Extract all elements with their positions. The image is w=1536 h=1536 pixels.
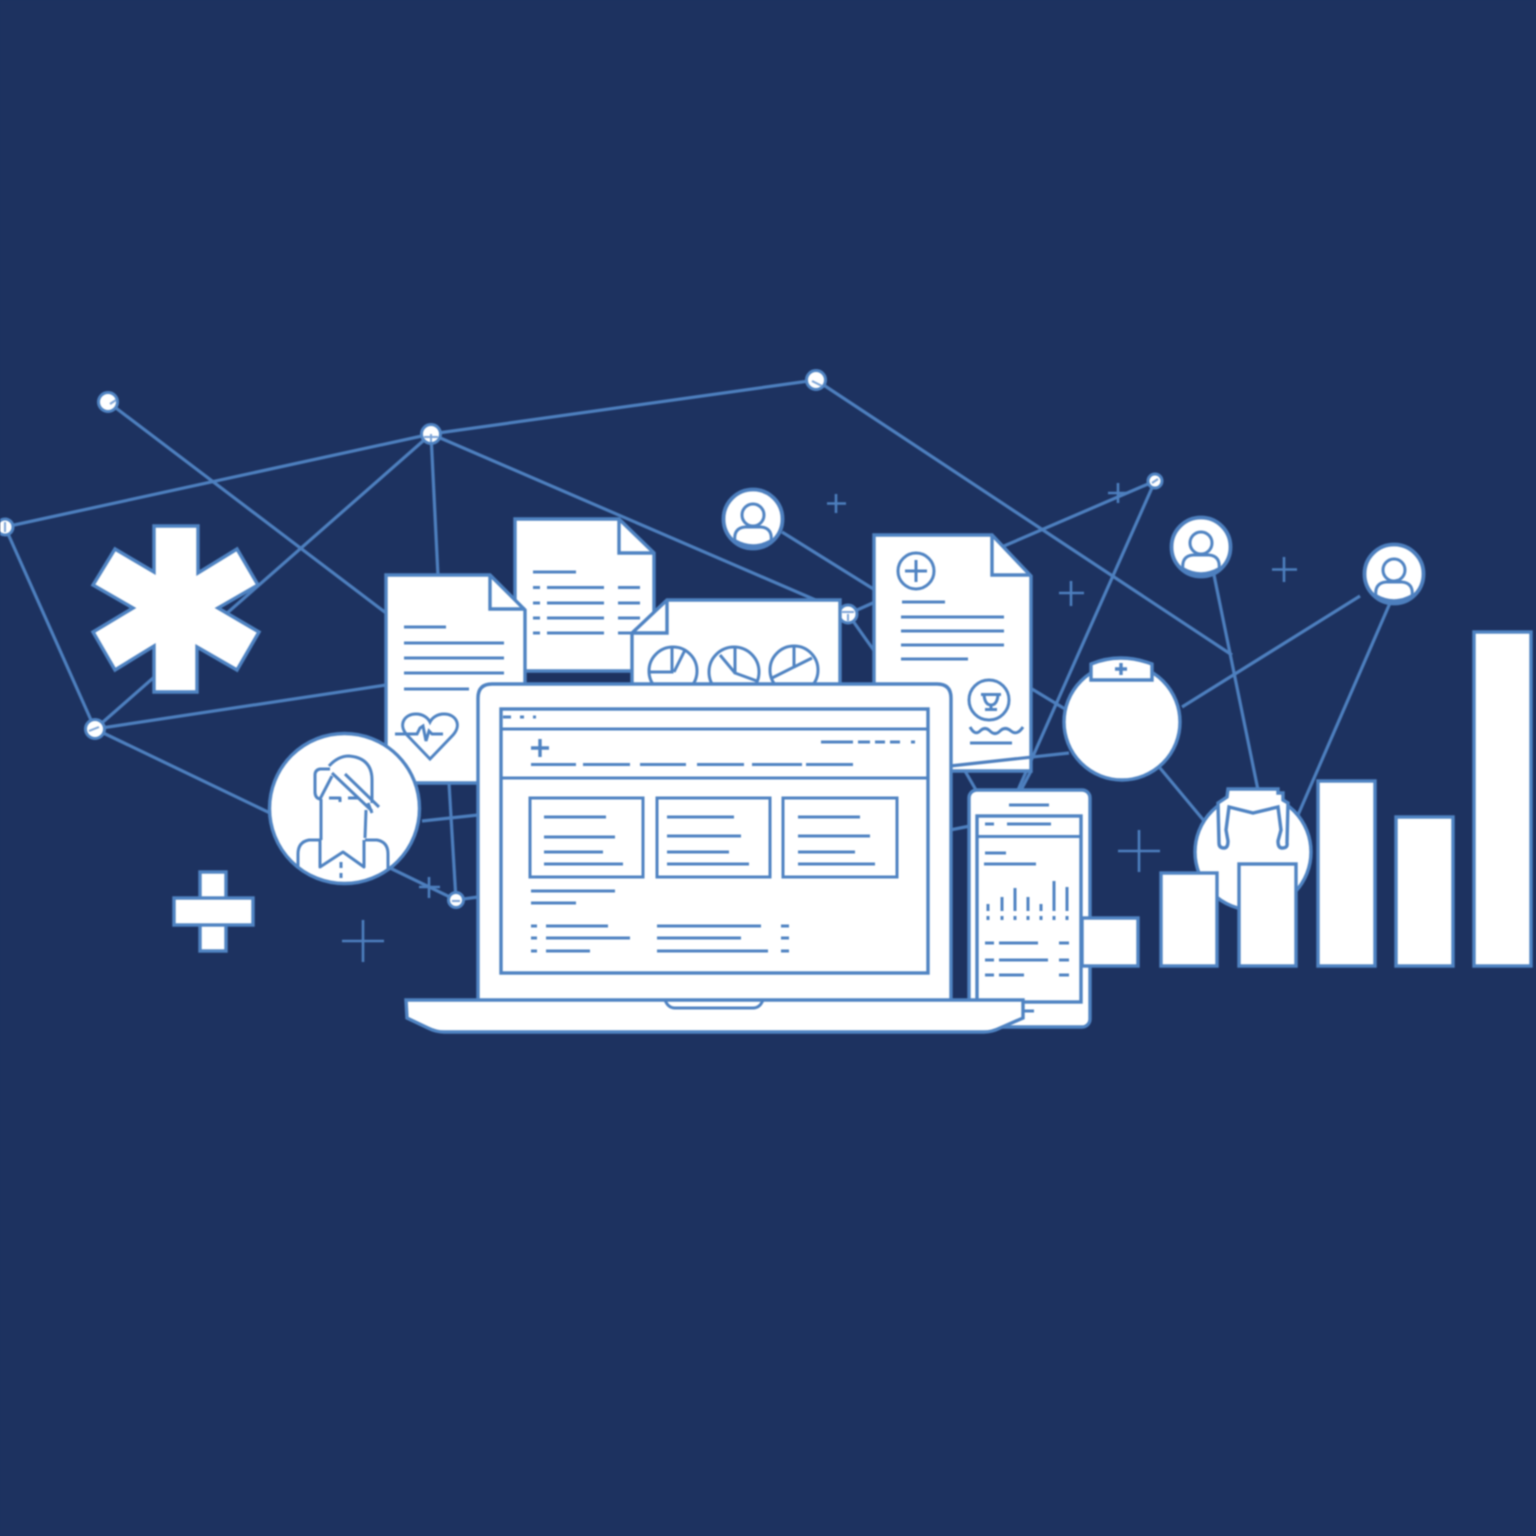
icon: plus badge: [898, 553, 934, 589]
icon: heart with pulse: [395, 714, 457, 759]
network connection lines: [5, 380, 1390, 900]
user icon 3: [1364, 544, 1424, 604]
document: pie chart sheet: [632, 600, 840, 697]
dashboard card 1: [530, 798, 643, 877]
icon: trophy seal: [969, 680, 1009, 720]
line crossing certificate to nurse: [950, 753, 1069, 766]
bar chart: [1161, 632, 1531, 966]
user icon 1: [724, 490, 782, 548]
document: lined report behind: [515, 519, 654, 671]
small plus signs: [342, 483, 1297, 962]
icon: star of life asterisk: [93, 526, 259, 692]
laptop base: [406, 1000, 1023, 1032]
network nodes: [0, 370, 1162, 908]
phone: [969, 790, 1138, 1027]
bar chart first bar: [1082, 918, 1138, 966]
pie charts: [649, 646, 818, 697]
avatar: woman: [270, 734, 420, 884]
dashboard card 2: [657, 798, 770, 877]
avatars: network users: [724, 490, 1424, 604]
user icon 2: [1172, 518, 1230, 576]
document: certificate with plus and trophy: [874, 535, 1031, 771]
avatar: man with hair: [1195, 789, 1311, 910]
avatar: nurse: [1064, 658, 1180, 780]
laptop: [406, 684, 1023, 1032]
document: heart health record: [386, 575, 525, 783]
icon: white medical plus: [174, 872, 253, 951]
dashboard card 3: [783, 798, 897, 877]
phone mini chart: [988, 881, 1067, 920]
